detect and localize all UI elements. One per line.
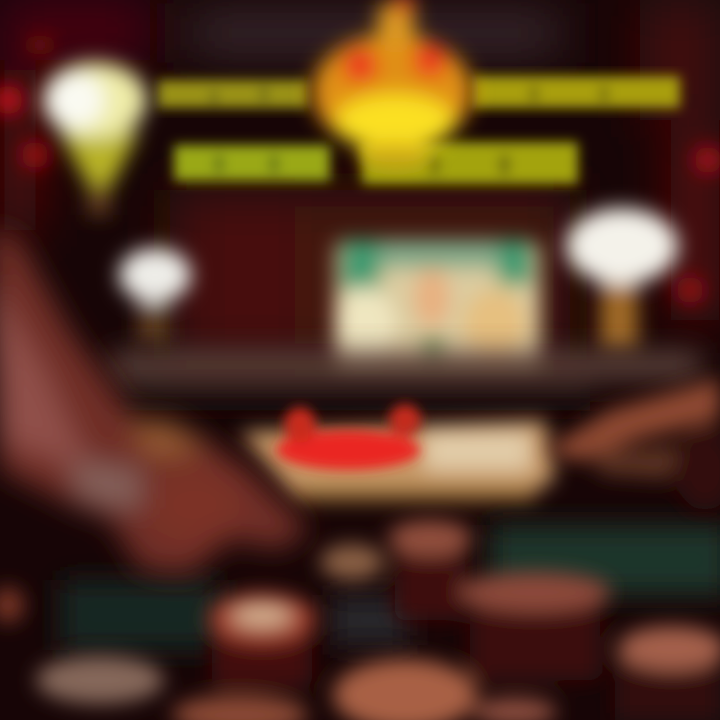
background wall glow	[0, 0, 720, 360]
poker chip stacks	[0, 520, 720, 720]
chip stack: centre back	[388, 520, 472, 620]
chip stack: bottom centre	[333, 659, 557, 720]
chip stack: far right	[615, 626, 720, 720]
chip stack: right row	[459, 572, 611, 680]
chip: far left edge	[0, 587, 24, 623]
sign: lower text band	[174, 142, 578, 184]
central screen	[335, 240, 540, 367]
green felt	[60, 525, 720, 650]
chip: left flat	[36, 656, 164, 704]
crown emblem	[312, 0, 472, 168]
right lamp	[566, 208, 678, 350]
left lamp	[43, 62, 147, 215]
dealer table	[240, 420, 555, 501]
chip: bottom left	[172, 695, 308, 720]
chip stack: left centre	[208, 592, 316, 687]
red lights	[0, 35, 720, 304]
red cards on table	[276, 404, 421, 470]
left arm and hand	[0, 225, 310, 575]
counter band	[110, 352, 700, 410]
chip: small centre	[320, 544, 384, 580]
right arm and hand	[545, 378, 720, 510]
small left lamp	[119, 248, 191, 342]
sign: top text band	[158, 76, 680, 108]
